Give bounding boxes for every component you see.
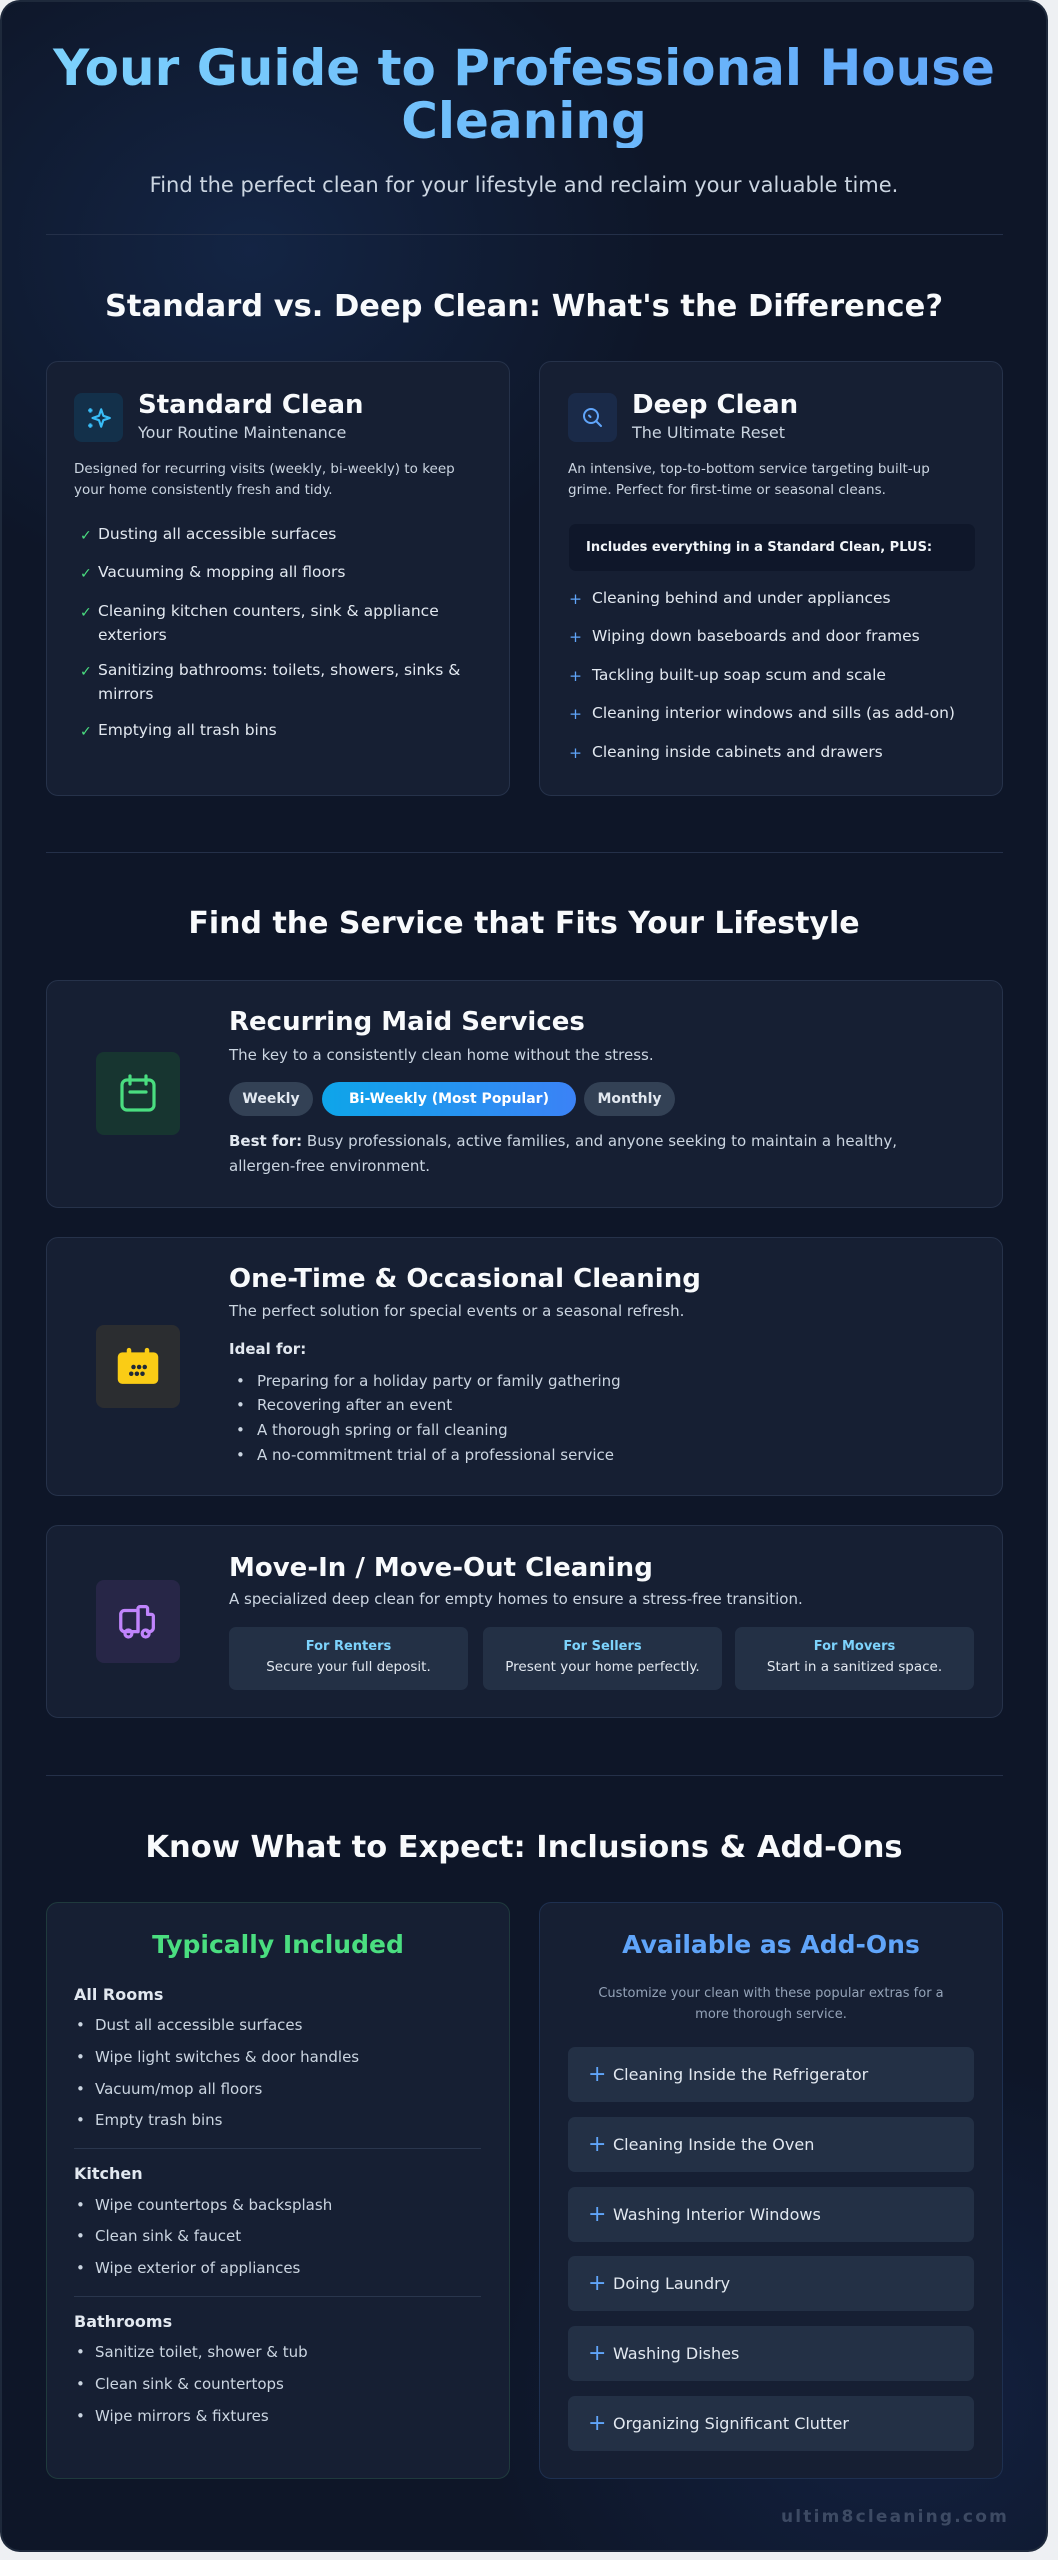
pills: Bi-Weekly (Most Popular)	[349, 1091, 549, 1107]
panel: recurring maid	[46, 980, 1003, 1208]
included lists: Wipe countertops & backsplash	[95, 2196, 332, 2214]
card title: Standard Clean	[138, 390, 364, 420]
plus list: Wiping down baseboards and door frames	[592, 627, 920, 645]
icon: calendar outline	[96, 1052, 180, 1135]
add-on list: Washing Interior Windows	[613, 2205, 821, 2224]
audience boxes	[229, 1627, 974, 1690]
included lists: Kitchen	[74, 2164, 143, 2183]
included lists: •	[76, 2080, 85, 2098]
panel: standard clean: Your Routine Maintenance	[138, 423, 346, 442]
included lists: •	[76, 2259, 85, 2277]
audience boxes: For Movers	[814, 1639, 895, 1654]
icon: calendar solid	[96, 1325, 180, 1408]
icon: sparkle	[74, 393, 123, 442]
checklist: ✓	[80, 605, 92, 621]
checklist	[80, 525, 460, 740]
included lists: Bathrooms	[74, 2312, 172, 2331]
checklist: Cleaning kitchen counters, sink & appliance exteriors	[98, 602, 439, 644]
callout: includes: Includes everything in a Standard Clean, PLUS:	[586, 540, 932, 555]
ideal for list: A thorough spring or fall cleaning	[257, 1421, 508, 1439]
add-ons description: Customize your clean with these popular extras for a more thorough service.	[598, 1986, 944, 2022]
pills	[229, 1082, 675, 1116]
subtitle: Find the perfect clean for your lifestyle and reclaim your valuable time.	[150, 173, 898, 197]
included lists: Vacuum/mop all floors	[95, 2080, 262, 2098]
panel: standard clean	[46, 361, 510, 796]
panel: typically included	[46, 1902, 510, 2479]
included lists: •	[76, 2407, 85, 2425]
icon: truck	[96, 1580, 180, 1663]
audience boxes: For Renters	[306, 1639, 391, 1654]
add-on list: Cleaning Inside the Oven	[613, 2135, 814, 2154]
add-on list: +	[588, 2202, 606, 2227]
plus list: +	[569, 744, 582, 762]
add-on list	[568, 2047, 974, 2451]
panel: one-time	[46, 1237, 1003, 1496]
checklist: Sanitizing bathrooms: toilets, showers, sinks & mirrors	[98, 661, 460, 703]
footer: site: ultim8cleaning.com	[781, 2507, 1009, 2527]
checklist: Emptying all trash bins	[98, 721, 277, 739]
included lists: Wipe mirrors & fixtures	[95, 2407, 269, 2425]
included lists: Wipe light switches & door handles	[95, 2048, 359, 2066]
add-on list: +	[588, 2062, 606, 2087]
move title: Move-In / Move-Out Cleaning	[229, 1553, 653, 1583]
ideal for list: •	[236, 1372, 245, 1390]
checklist: ✓	[80, 528, 92, 544]
ideal for list: •	[236, 1421, 245, 1439]
plus list: +	[569, 590, 582, 608]
checklist: ✓	[80, 664, 92, 680]
heading: find the service: Find the Service that Fits Your Lifestyle	[188, 906, 860, 941]
panel: deep clean	[539, 361, 1003, 796]
included lists	[74, 1985, 481, 2425]
text: The perfect solution for special events or a seasonal refresh.	[229, 1302, 684, 1320]
plus list: Cleaning inside cabinets and drawers	[592, 743, 883, 761]
included lists: •	[76, 2111, 85, 2129]
checklist: Vacuuming & mopping all floors	[98, 563, 345, 581]
one-time title: One-Time & Occasional Cleaning	[229, 1264, 701, 1294]
panel: deep clean: The Ultimate Reset	[632, 423, 785, 442]
add-ons heading: Available as Add-Ons	[622, 1930, 920, 1959]
title: Your Guide to Professional House Cleaning	[53, 39, 995, 150]
included lists: Wipe exterior of appliances	[95, 2259, 300, 2277]
included lists: •	[76, 2048, 85, 2066]
text: The key to a consistently clean home without the stress.	[229, 1046, 654, 1064]
heading: standard vs deep: Standard vs. Deep Clean: What's the Difference?	[105, 289, 943, 324]
included lists: •	[76, 2227, 85, 2245]
heading: know what to expect: Know What to Expect: Inclusions & Add-Ons	[145, 1830, 903, 1865]
included heading: Typically Included	[152, 1930, 404, 1959]
included lists: Sanitize toilet, shower & tub	[95, 2343, 308, 2361]
ideal for list: •	[236, 1396, 245, 1414]
ideal for list: Preparing for a holiday party or family gathering	[257, 1372, 621, 1390]
ideal for list: A no-commitment trial of a professional service	[257, 1446, 614, 1464]
included lists: Empty trash bins	[95, 2111, 222, 2129]
add-on list: +	[588, 2341, 606, 2366]
icon: magnifier	[568, 393, 617, 442]
audience boxes: Secure your full deposit.	[266, 1659, 431, 1675]
add-on list: Cleaning Inside the Refrigerator	[613, 2065, 868, 2084]
add-on list: Washing Dishes	[613, 2344, 739, 2363]
recurring title: Recurring Maid Services	[229, 1007, 585, 1037]
plus list: +	[569, 667, 582, 685]
plus list	[569, 589, 955, 762]
audience boxes: For Sellers	[563, 1639, 642, 1654]
pills: Weekly	[242, 1091, 300, 1107]
plus list: Cleaning behind and under appliances	[592, 589, 891, 607]
add-on list: +	[588, 2411, 606, 2436]
add-on list: Doing Laundry	[613, 2274, 730, 2293]
audience boxes: Start in a sanitized space.	[767, 1659, 942, 1675]
included lists: Clean sink & faucet	[95, 2227, 241, 2245]
description: An intensive, top-to-bottom service targeting built-up grime. Perfect for first-time or seasonal cleans.	[568, 461, 930, 498]
included lists: All Rooms	[74, 1985, 163, 2004]
ideal for list	[229, 1340, 621, 1464]
add-on list: +	[588, 2271, 606, 2296]
panel: add-ons	[539, 1902, 1003, 2479]
included lists: •	[76, 2375, 85, 2393]
add-on list: +	[588, 2132, 606, 2157]
plus list: +	[569, 705, 582, 723]
included lists: •	[76, 2196, 85, 2214]
included lists: Clean sink & countertops	[95, 2375, 284, 2393]
ideal for list: •	[236, 1446, 245, 1464]
card title: Deep Clean	[632, 390, 798, 420]
included lists: Dust all accessible surfaces	[95, 2016, 302, 2034]
included lists: •	[76, 2016, 85, 2034]
ideal for list: Ideal for:	[229, 1340, 306, 1358]
audience boxes: Present your home perfectly.	[505, 1659, 700, 1675]
checklist: ✓	[80, 724, 92, 740]
plus list: Cleaning interior windows and sills (as add-on)	[592, 704, 955, 722]
description: Designed for recurring visits (weekly, bi-weekly) to keep your home consistently fresh and tidy.	[74, 461, 455, 498]
panel: move-in/out	[46, 1525, 1003, 1718]
best for: Best for: Busy professionals, active families, and anyone seeking to maintain a healthy, allergen-free environment.	[229, 1132, 897, 1175]
callout: includes	[569, 524, 975, 571]
included lists: •	[76, 2343, 85, 2361]
checklist: Dusting all accessible surfaces	[98, 525, 336, 543]
pills: Monthly	[597, 1091, 662, 1107]
checklist: ✓	[80, 566, 92, 582]
ideal for list: Recovering after an event	[257, 1396, 452, 1414]
plus list: +	[569, 628, 582, 646]
add-on list: Organizing Significant Clutter	[613, 2414, 849, 2433]
text: A specialized deep clean for empty homes to ensure a stress-free transition.	[229, 1590, 803, 1608]
plus list: Tackling built-up soap scum and scale	[592, 666, 886, 684]
